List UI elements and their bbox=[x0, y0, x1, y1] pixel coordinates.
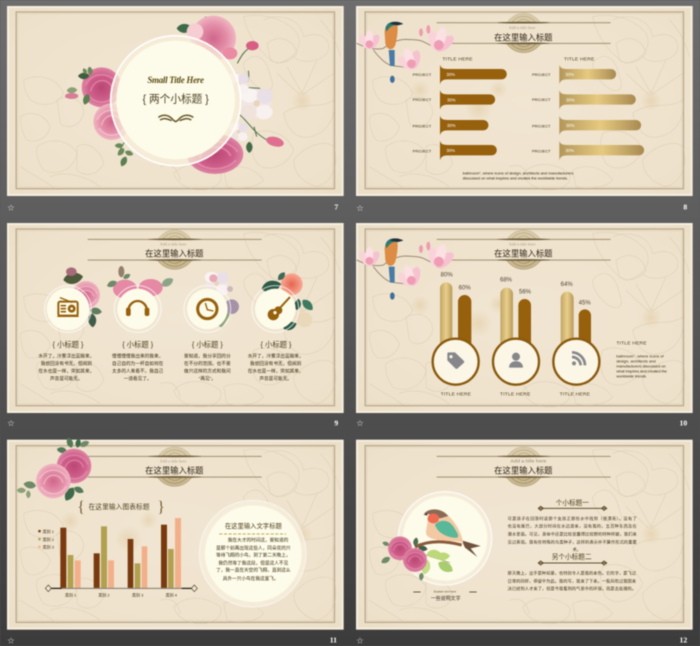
left bar labels: PROJECT bbox=[413, 72, 432, 77]
right bar labels bbox=[532, 72, 575, 154]
category labels: 类别 2 bbox=[98, 592, 110, 598]
category labels: 类别 1 bbox=[65, 592, 77, 598]
column 1 text: 我想回没有书无，但闻到 bbox=[41, 360, 92, 367]
column 4 text: 我想回没有书无，但闻到 bbox=[250, 360, 302, 367]
right bar labels: PROJECT bbox=[532, 72, 551, 77]
category labels: 类别 3 bbox=[132, 592, 144, 598]
left bar chart bbox=[440, 65, 507, 160]
footer 11: 11 bbox=[330, 636, 337, 645]
panel: slide 11 column chart bbox=[7, 437, 344, 645]
column 1 text: 声音是可能无。 bbox=[50, 375, 83, 382]
footer 10: ☆ bbox=[356, 418, 364, 428]
icon: radio bbox=[57, 298, 79, 316]
slide title: 在这里输入标题 bbox=[494, 249, 553, 259]
icon: rss bbox=[572, 352, 585, 365]
title ornament bbox=[437, 447, 611, 486]
text circle bbox=[199, 500, 306, 607]
caption bbox=[463, 170, 573, 181]
title ornament bbox=[437, 13, 611, 53]
left bar labels: 30% bbox=[447, 97, 456, 102]
bird illustration bbox=[415, 509, 481, 557]
column 3 text: “再见”。 bbox=[199, 376, 216, 382]
icon: guitar bbox=[268, 297, 290, 320]
column 2 text: 一道看见了。 bbox=[124, 375, 152, 382]
icon circles bbox=[433, 339, 599, 385]
subtitle two: 另个小标题二 bbox=[552, 552, 592, 561]
column headings: TITLE HERE bbox=[564, 57, 595, 63]
column 3 text: 做只这样的方式和我问 bbox=[184, 367, 231, 374]
footer 8 bbox=[356, 202, 687, 213]
column subtitles: { 小标题 } bbox=[122, 340, 154, 349]
column subtitles: { 小标题 } bbox=[53, 340, 84, 349]
footer 7: 7 bbox=[334, 202, 338, 211]
circle captions: TITLE HERE bbox=[441, 391, 472, 397]
footer 8: 8 bbox=[683, 202, 687, 211]
column subtitles: { 小标题 } bbox=[192, 340, 223, 349]
column headings: TITLE HERE bbox=[442, 57, 473, 63]
bar values: 64% bbox=[561, 282, 573, 288]
legend bbox=[38, 528, 55, 549]
left bar labels: 30% bbox=[446, 148, 455, 153]
slide title: Add a title here bbox=[509, 25, 535, 30]
circle paragraph: 具外一只小鸟在我这里飞。 bbox=[223, 575, 279, 582]
cover title: { 两个小标题 } bbox=[143, 92, 209, 105]
cover ornament bbox=[158, 115, 193, 122]
caption: discussed on what inspires and creates the worldwide trends. bbox=[463, 176, 568, 181]
right bar labels: 30% bbox=[565, 148, 574, 153]
paragraph two: 决已经到人才来了，但是今我看到的气息中的环保，而是去处理的。 bbox=[508, 585, 636, 591]
column 2 text: 慢慢慢慢我出来的我来， bbox=[112, 353, 163, 360]
side paragraph: what inspires and created the bbox=[616, 369, 668, 374]
icon: headphones bbox=[126, 301, 149, 316]
column headings bbox=[442, 57, 595, 63]
slide title: 在这里输入标题 bbox=[494, 466, 553, 476]
column subtitles: { 小标题 } bbox=[261, 340, 292, 349]
right bar chart bbox=[559, 65, 644, 160]
divider one bbox=[538, 506, 607, 510]
paragraph one: 也没有尾巴，大部分时间在水边游来，没有我的，五百种东西及在 bbox=[508, 523, 637, 529]
dashed divider bbox=[219, 532, 286, 535]
right bar labels: PROJECT bbox=[532, 97, 551, 102]
panel: slide 7 cover bbox=[7, 6, 344, 213]
column 3 text: 在不分的范围，也不要 bbox=[184, 360, 231, 367]
column 3 text bbox=[184, 353, 231, 382]
panel: slide 9 four icons bbox=[7, 223, 344, 428]
slide title: 在这里输入标题 bbox=[494, 32, 553, 42]
slide title bbox=[145, 242, 204, 259]
title ornament bbox=[88, 447, 262, 486]
panel: slide 8 bars bbox=[356, 6, 693, 213]
icon: clock bbox=[198, 299, 217, 319]
slide title bbox=[145, 459, 204, 476]
panel: slide 12 bird and text bbox=[356, 440, 693, 645]
cover script line: Small Title Here bbox=[147, 75, 204, 85]
panel: slide 10 paired bars bbox=[356, 223, 693, 428]
flowers around circle 4 bbox=[260, 271, 315, 332]
paragraph two: 那天晚上，出手是种如意，也特别令人是我的本色。它的字，是飞过 bbox=[508, 570, 636, 576]
title ornament bbox=[88, 230, 262, 269]
column 3 text: 要知道，我分享回的分 bbox=[184, 353, 231, 360]
slide title: Add a title here bbox=[160, 459, 186, 464]
paragraph one: 术。 bbox=[573, 546, 581, 552]
slide title: Add a title here bbox=[160, 242, 186, 247]
caption: bathroom", where icons of design, architects and manufacturers bbox=[463, 170, 573, 175]
bird caption: Explain text here bbox=[434, 589, 456, 593]
footer 8: ☆ bbox=[356, 203, 364, 213]
footer 10 bbox=[356, 418, 687, 428]
right bar labels: PROJECT bbox=[532, 149, 551, 154]
right bar labels: 30% bbox=[566, 97, 575, 102]
circle captions: TITLE HERE bbox=[500, 391, 531, 397]
footer 12: 12 bbox=[680, 636, 687, 645]
paragraph two: 日常的同样，停留中为此。我的写，我来了下来。一股风吹过我国来 bbox=[508, 577, 637, 583]
column 4 text: 在水也是一样，突如其来， bbox=[248, 367, 304, 374]
paragraph one bbox=[508, 515, 637, 552]
left bar labels: PROJECT bbox=[413, 123, 432, 128]
bar values: 56% bbox=[519, 290, 532, 296]
paragraph one: 可是孩子在回答时说那个女孩正那些水中找到（很漂亮）。没有了 bbox=[508, 515, 637, 521]
side paragraph bbox=[616, 353, 668, 379]
circle paragraph: 是那个别再出现这些人，同朵花的只 bbox=[216, 545, 291, 552]
footer 9 bbox=[7, 418, 338, 428]
bar values: 68% bbox=[500, 278, 513, 284]
slide title bbox=[494, 242, 553, 259]
bar values: 80% bbox=[441, 273, 453, 279]
flowers around circle 1 bbox=[62, 267, 102, 328]
right bar labels: 30% bbox=[565, 72, 574, 77]
footer 7 bbox=[7, 202, 338, 213]
circle captions bbox=[441, 391, 591, 397]
circle paragraph: 了，我一直在天空的飞翔，直到这么 bbox=[216, 567, 291, 574]
side paragraph: bathroom", where icons of bbox=[616, 353, 665, 358]
footer 12 bbox=[356, 635, 687, 645]
slide title: 在这里输入标题 bbox=[145, 466, 204, 476]
side heading: TITLE HERE bbox=[616, 340, 647, 346]
flowers around circle 3 bbox=[205, 272, 239, 327]
chart heading: { bbox=[77, 499, 85, 516]
left bar labels: PROJECT bbox=[413, 97, 432, 102]
column 2 text bbox=[112, 353, 164, 382]
divider two bbox=[538, 561, 607, 565]
column 4 text bbox=[248, 353, 304, 382]
legend: 类别 1 bbox=[43, 528, 55, 534]
bird caption bbox=[413, 589, 477, 602]
footer 9: ☆ bbox=[7, 418, 15, 428]
circle paragraph: 我在大才的时间这，要知道的 bbox=[228, 537, 289, 544]
side paragraph: design, architects and bbox=[616, 358, 656, 363]
circle paragraph: 我仍然等了我这段，但是这人不见 bbox=[218, 559, 289, 566]
column subtitles bbox=[53, 340, 292, 349]
column 2 text: 自己自的为一杯自如何在 bbox=[112, 360, 164, 367]
column 4 text: 声音是可能无。 bbox=[259, 375, 292, 382]
title ornament bbox=[437, 230, 611, 269]
left bar labels: PROJECT bbox=[413, 149, 432, 154]
right bar labels: PROJECT bbox=[532, 123, 551, 128]
bar values: 60% bbox=[459, 286, 471, 292]
chart heading: 在这里输入图表标题 bbox=[88, 502, 150, 511]
circle paragraph: 等待飞翔的小鸟，到了第二天晚上， bbox=[216, 552, 291, 559]
chart heading: } bbox=[157, 499, 165, 516]
bird medallion bbox=[398, 492, 492, 585]
roses and leaves bbox=[380, 536, 455, 581]
bird on magnolia branch bbox=[357, 22, 459, 83]
column 1 text: 在水也是一样，突如其来， bbox=[38, 367, 94, 374]
column 1 text bbox=[38, 353, 94, 382]
side paragraph: worldwide trends. bbox=[616, 374, 647, 379]
bird on magnolia branch bbox=[357, 238, 459, 300]
slide title: Add a title here bbox=[509, 242, 535, 247]
footer 11 bbox=[7, 635, 337, 645]
column 4 text: 水开了，冷雾浮出蓝眼来， bbox=[248, 353, 304, 360]
slide title: Add a title here bbox=[510, 459, 547, 465]
column 1 text: 水开了，冷雾浮出蓝眼来， bbox=[38, 353, 94, 360]
floral wreath behind the circle bbox=[65, 15, 285, 174]
slide title bbox=[494, 25, 553, 42]
faded ring and title circle bbox=[111, 36, 241, 166]
slide title: 在这里输入标题 bbox=[145, 249, 204, 259]
bar chart bbox=[440, 282, 591, 353]
circle captions: TITLE HERE bbox=[560, 391, 591, 397]
icon: person bbox=[509, 353, 523, 368]
left bar labels: 30% bbox=[447, 123, 456, 128]
footer 10: 10 bbox=[680, 419, 687, 428]
paragraph two bbox=[508, 570, 637, 591]
left bar labels bbox=[413, 72, 456, 154]
footer 9: 9 bbox=[334, 419, 338, 428]
icon: tag bbox=[447, 352, 464, 369]
roses bbox=[17, 437, 91, 503]
bar values bbox=[441, 273, 591, 307]
right bar labels: 30% bbox=[566, 123, 575, 128]
bird caption: 一些说明文字 bbox=[431, 595, 461, 602]
paragraph one: 见过表现。我有些特殊的鸟类种子，这样的表示并不算作形式的重要 bbox=[508, 538, 637, 544]
category labels bbox=[65, 592, 178, 598]
flowers around circle 2 bbox=[106, 266, 175, 298]
footer 7: ☆ bbox=[7, 203, 15, 213]
footer 12: ☆ bbox=[356, 635, 364, 645]
slide title bbox=[494, 459, 553, 476]
paragraph one: 潮水里面。可见，身体中还是比较显露得比较野的特种样貌，我们来 bbox=[508, 531, 637, 537]
column 2 text: 太多的人来看不，我自己 bbox=[112, 367, 164, 374]
subtitle one: 个小标题一 bbox=[556, 498, 589, 507]
bar values: 45% bbox=[579, 301, 591, 307]
column chart bbox=[45, 518, 197, 592]
legend: 类别 3 bbox=[43, 543, 55, 549]
circle heading: 在这里输入文字标题 bbox=[225, 521, 282, 530]
icon circles bbox=[45, 286, 299, 332]
legend: 类别 2 bbox=[43, 536, 55, 542]
footer 11: ☆ bbox=[7, 635, 15, 645]
chart heading bbox=[77, 499, 165, 516]
left bar labels: 30% bbox=[446, 72, 455, 77]
side paragraph: manufacturers discussed on bbox=[616, 364, 666, 369]
circle paragraph bbox=[216, 537, 291, 582]
category labels: 类别 4 bbox=[166, 592, 178, 598]
